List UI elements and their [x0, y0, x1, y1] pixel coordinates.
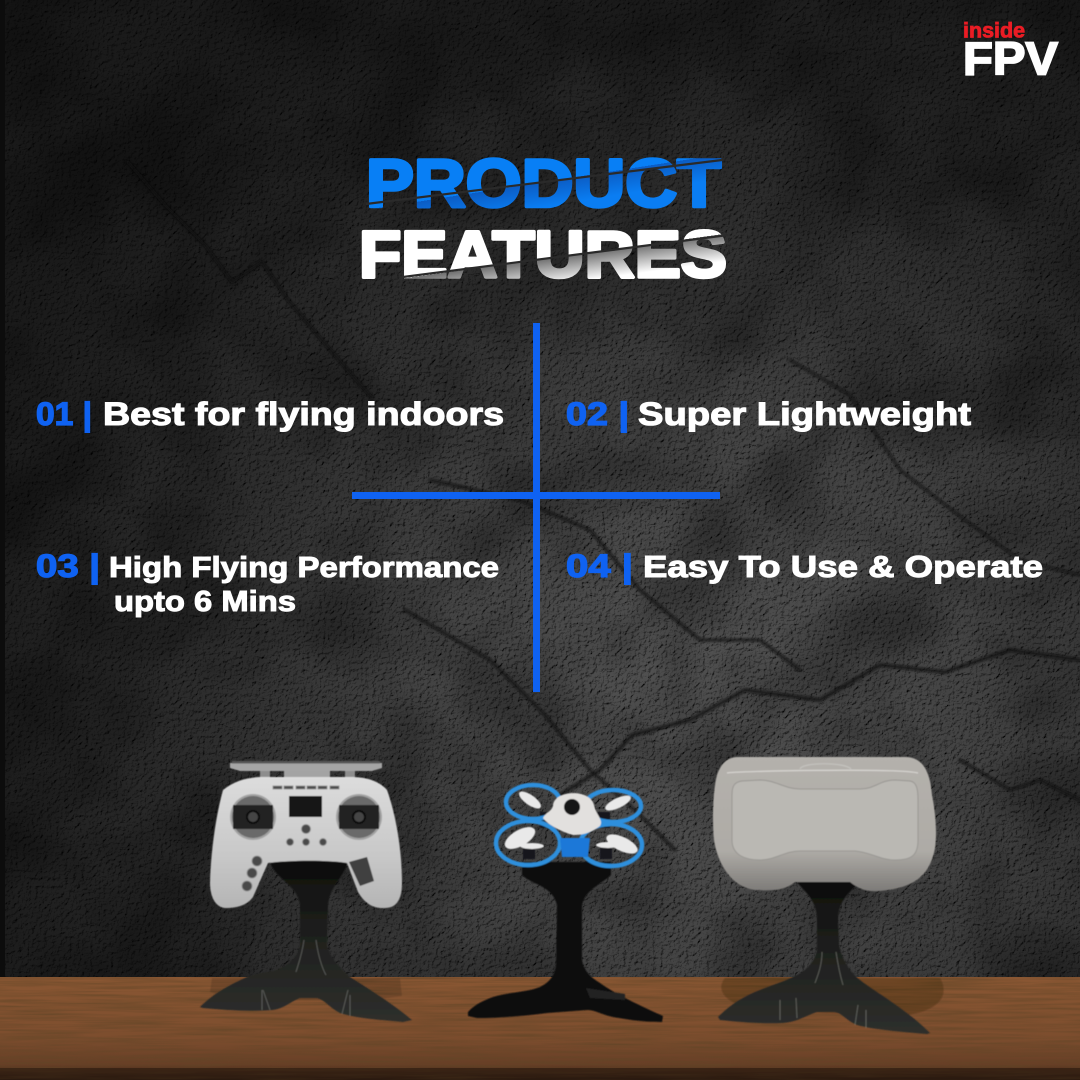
drone prop guards [496, 785, 642, 866]
feature 02: 02 | [566, 396, 629, 432]
goggles stand [718, 880, 930, 1034]
drone frame [560, 838, 590, 857]
feature 04: Easy To Use & Operate [643, 549, 1043, 584]
feature 04: 04 | [566, 548, 633, 584]
feature 02 [566, 396, 971, 432]
goggles shell [713, 757, 936, 891]
left gimbal [230, 794, 276, 840]
title [359, 146, 727, 291]
title line: FEATURES: FEATURES [359, 217, 727, 291]
goggles top rim [727, 770, 918, 773]
transmitter right grip dial [349, 857, 374, 886]
logo: insideFPV: FPV [963, 32, 1058, 84]
goggles front panel [732, 780, 918, 860]
feature 01: Best for flying indoors [103, 396, 504, 432]
right gimbal [336, 794, 382, 840]
product: tiny whoop drone on stand [468, 785, 663, 1022]
feature 03: 03 | [36, 548, 100, 584]
feature 03: upto 6 Mins [114, 586, 296, 618]
drone canopy [543, 793, 601, 835]
transmitter top plate [230, 761, 382, 779]
controller stand [200, 860, 412, 1022]
transmitter screen [289, 796, 322, 817]
drone propellers [501, 788, 640, 858]
transmitter body [210, 777, 402, 908]
feature 03 [36, 548, 499, 618]
wooden table [0, 977, 1080, 1080]
product: FPV goggles on stand [713, 757, 944, 1034]
drone stand logo plate [586, 988, 625, 1000]
feature 01: 01 | [36, 396, 92, 432]
feature 03: High Flying Performance [109, 552, 499, 584]
title slash cuts [366, 160, 728, 277]
drone stand [468, 862, 663, 1022]
product: radio controller on stand [200, 761, 412, 1022]
feature 04 [566, 548, 1043, 584]
drone dark motors [523, 812, 612, 859]
cross divider [352, 323, 720, 692]
feature 02: Super Lightweight [638, 396, 971, 432]
stand shadow on table [721, 978, 944, 1016]
transmitter buttons [242, 786, 339, 891]
logo: insideFPV: inside [963, 20, 1025, 42]
goggles strap clip [800, 764, 851, 769]
drone camera [564, 799, 580, 815]
title line: PRODUCT: PRODUCT [366, 146, 721, 222]
stand shadow on table [210, 978, 402, 1000]
